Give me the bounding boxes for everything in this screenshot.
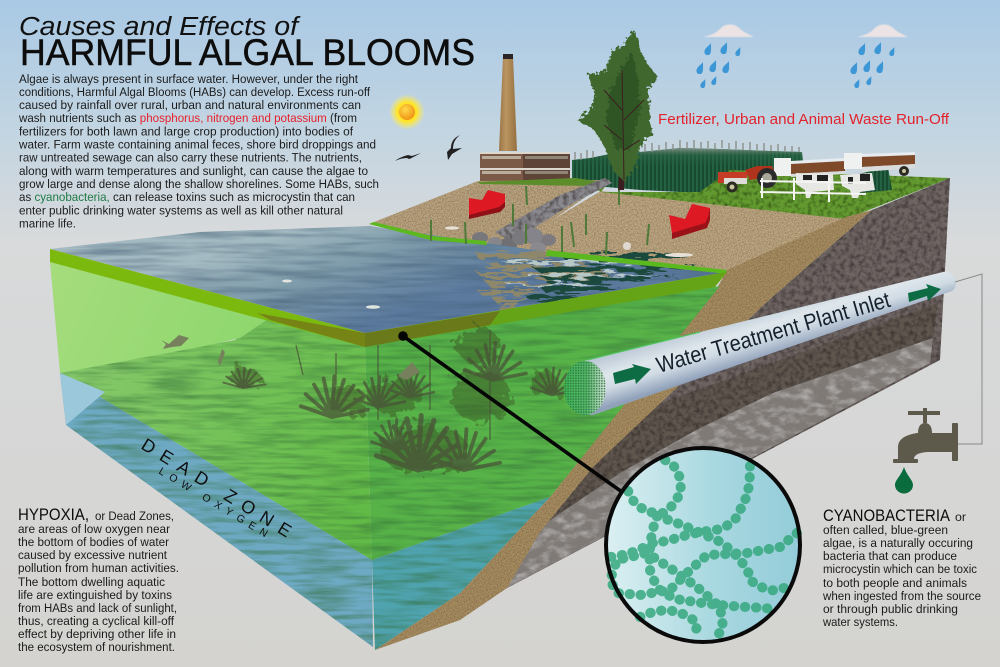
water column: dead zone right	[372, 497, 550, 650]
label: dead zone: LOW OXYGEN	[156, 465, 270, 540]
pipe arrow right	[908, 284, 941, 302]
grass field	[601, 170, 950, 219]
rock strata: top grey layer	[507, 178, 950, 588]
left sand bank	[369, 180, 610, 246]
title: HARMFUL ALGAL BLOOMS	[20, 32, 475, 73]
intro text block: along with warm temperatures and sunlight, can cause the algae to	[19, 164, 368, 178]
algae surface band right	[365, 272, 727, 347]
intro text block: wash nutrients such as phosphorus, nitrogen and potassium (from	[18, 111, 357, 125]
cyanobacteria text block	[822, 506, 981, 629]
water column: upper lime water	[50, 262, 268, 373]
icon: sun	[389, 94, 425, 130]
hypoxia text block: are areas of low oxygen near	[18, 522, 170, 536]
shoreline algae strips	[369, 222, 728, 274]
water treatment pipe	[564, 272, 956, 415]
cyanobacteria text block: algae, is a naturally occuring	[823, 536, 973, 550]
right sand bank	[505, 191, 846, 277]
icon: green drop	[895, 467, 913, 494]
intro text block	[18, 72, 379, 230]
shore reeds	[431, 186, 649, 255]
label: run-off: Fertilizer, Urban and Animal Waste Run-Off	[658, 111, 950, 128]
hypoxia text block	[18, 505, 179, 654]
intro text block: caused by rainfall over rural, urban and natural environments can	[19, 98, 361, 112]
icon: water tap	[893, 408, 958, 463]
hypoxia text block: The bottom dwelling aquatic	[18, 575, 165, 589]
thin connector from pipe to tap	[955, 274, 982, 444]
water surface	[50, 226, 727, 333]
intro text block: raw untreated sewage can also carry these nutrients. The nutrients,	[19, 150, 362, 164]
tree	[577, 30, 658, 190]
leader line to magnifier	[398, 331, 622, 492]
cyanobacteria text block: CYANOBACTERIA	[823, 506, 951, 525]
floating fish on water	[282, 280, 380, 309]
cows and fence	[760, 173, 875, 202]
rock retaining strip	[472, 178, 612, 254]
factory with chimney	[480, 54, 570, 184]
hypoxia text block: the bottom of bodies of water	[18, 535, 169, 549]
magnifier: cyanobacteria	[606, 448, 800, 642]
submerged plant masses	[229, 327, 561, 474]
cyanobacteria text block: microcystin which can be toxic	[823, 562, 977, 576]
hypoxia text block: pollution from human activities.	[18, 561, 179, 575]
icon: rain clouds and drops	[696, 24, 908, 88]
intro text block: conditions, Harmful Algal Blooms (HABs) can develop. Excess run-off	[19, 85, 371, 99]
cyanobacteria text block: or	[955, 510, 966, 524]
label: dead zone: DEAD ZONE	[138, 434, 295, 541]
grass strip behind factory	[478, 178, 608, 192]
water column: green right face	[365, 286, 720, 560]
rock strata: limestone layer	[507, 338, 933, 588]
intro text block: enter public drinking water systems as well as kill other natural	[19, 204, 343, 218]
cyanobacteria text block: or through public drinking	[823, 602, 958, 616]
hypoxia text block: caused by excessive nutrient	[18, 548, 168, 562]
intro text block: grow large and dense along the shallow shorelines. Some HABs, such	[19, 177, 379, 191]
title: Causes and Effects of	[19, 13, 301, 41]
hypoxia text block: thus, creating a cyclical kill-off	[18, 614, 175, 628]
cyanobacteria text block: when ingested from the source	[822, 589, 981, 603]
crop field	[572, 140, 804, 193]
intro text block: as cyanobacteria, can release toxins such as microcystin that can	[19, 190, 355, 204]
reflection in water	[475, 252, 705, 310]
water column: dead zone left	[60, 373, 373, 647]
sand slope cross-section	[375, 210, 872, 650]
red arrows: run-off direction	[469, 190, 710, 239]
intro text block: marine life.	[19, 216, 76, 230]
hypoxia text block: or Dead Zones,	[95, 509, 174, 523]
title	[19, 13, 475, 73]
hypoxia text block: from HABs and lack of sunlight,	[18, 601, 177, 615]
submerged plants	[224, 330, 576, 470]
dead fish and debris on shore	[445, 226, 693, 257]
water column: lake bed green left	[60, 318, 372, 560]
cyanobacteria text block: water systems.	[822, 615, 898, 629]
algae surface band left	[50, 249, 365, 347]
water column: pale blue corner	[60, 373, 105, 425]
pipe arrow left	[613, 364, 651, 384]
hypoxia text block: life are extinguished by toxins	[18, 588, 172, 602]
cyanobacteria text block: often called, blue-green	[823, 523, 948, 537]
tractor and wagons	[718, 152, 915, 192]
pipe mouth mesh	[564, 361, 606, 415]
intro text block: fertilizers for both lawn and large crop production) into bodies of	[19, 124, 354, 138]
cyanobacteria text block: to both people and animals	[823, 576, 967, 590]
corn patch by cows	[850, 167, 892, 193]
pipe label: Water Treatment Plant Inlet	[653, 287, 894, 378]
rock strata: brown layer	[507, 303, 938, 588]
icon: birds	[395, 135, 462, 161]
plant shadow over algae band	[257, 311, 500, 347]
intro text block: Algae is always present in surface water. However, under the right	[19, 72, 359, 86]
hypoxia text block: the ecosystem of nourishment.	[18, 640, 175, 654]
hypoxia text block: HYPOXIA,	[18, 505, 89, 524]
hypoxia text block: effect by depriving other life in	[18, 627, 176, 641]
small fish	[161, 335, 420, 380]
intro text block: water. Farm waste containing animal feces, shore bird droppings and	[18, 138, 376, 152]
cyanobacteria text block: bacteria that can produce	[823, 549, 957, 563]
